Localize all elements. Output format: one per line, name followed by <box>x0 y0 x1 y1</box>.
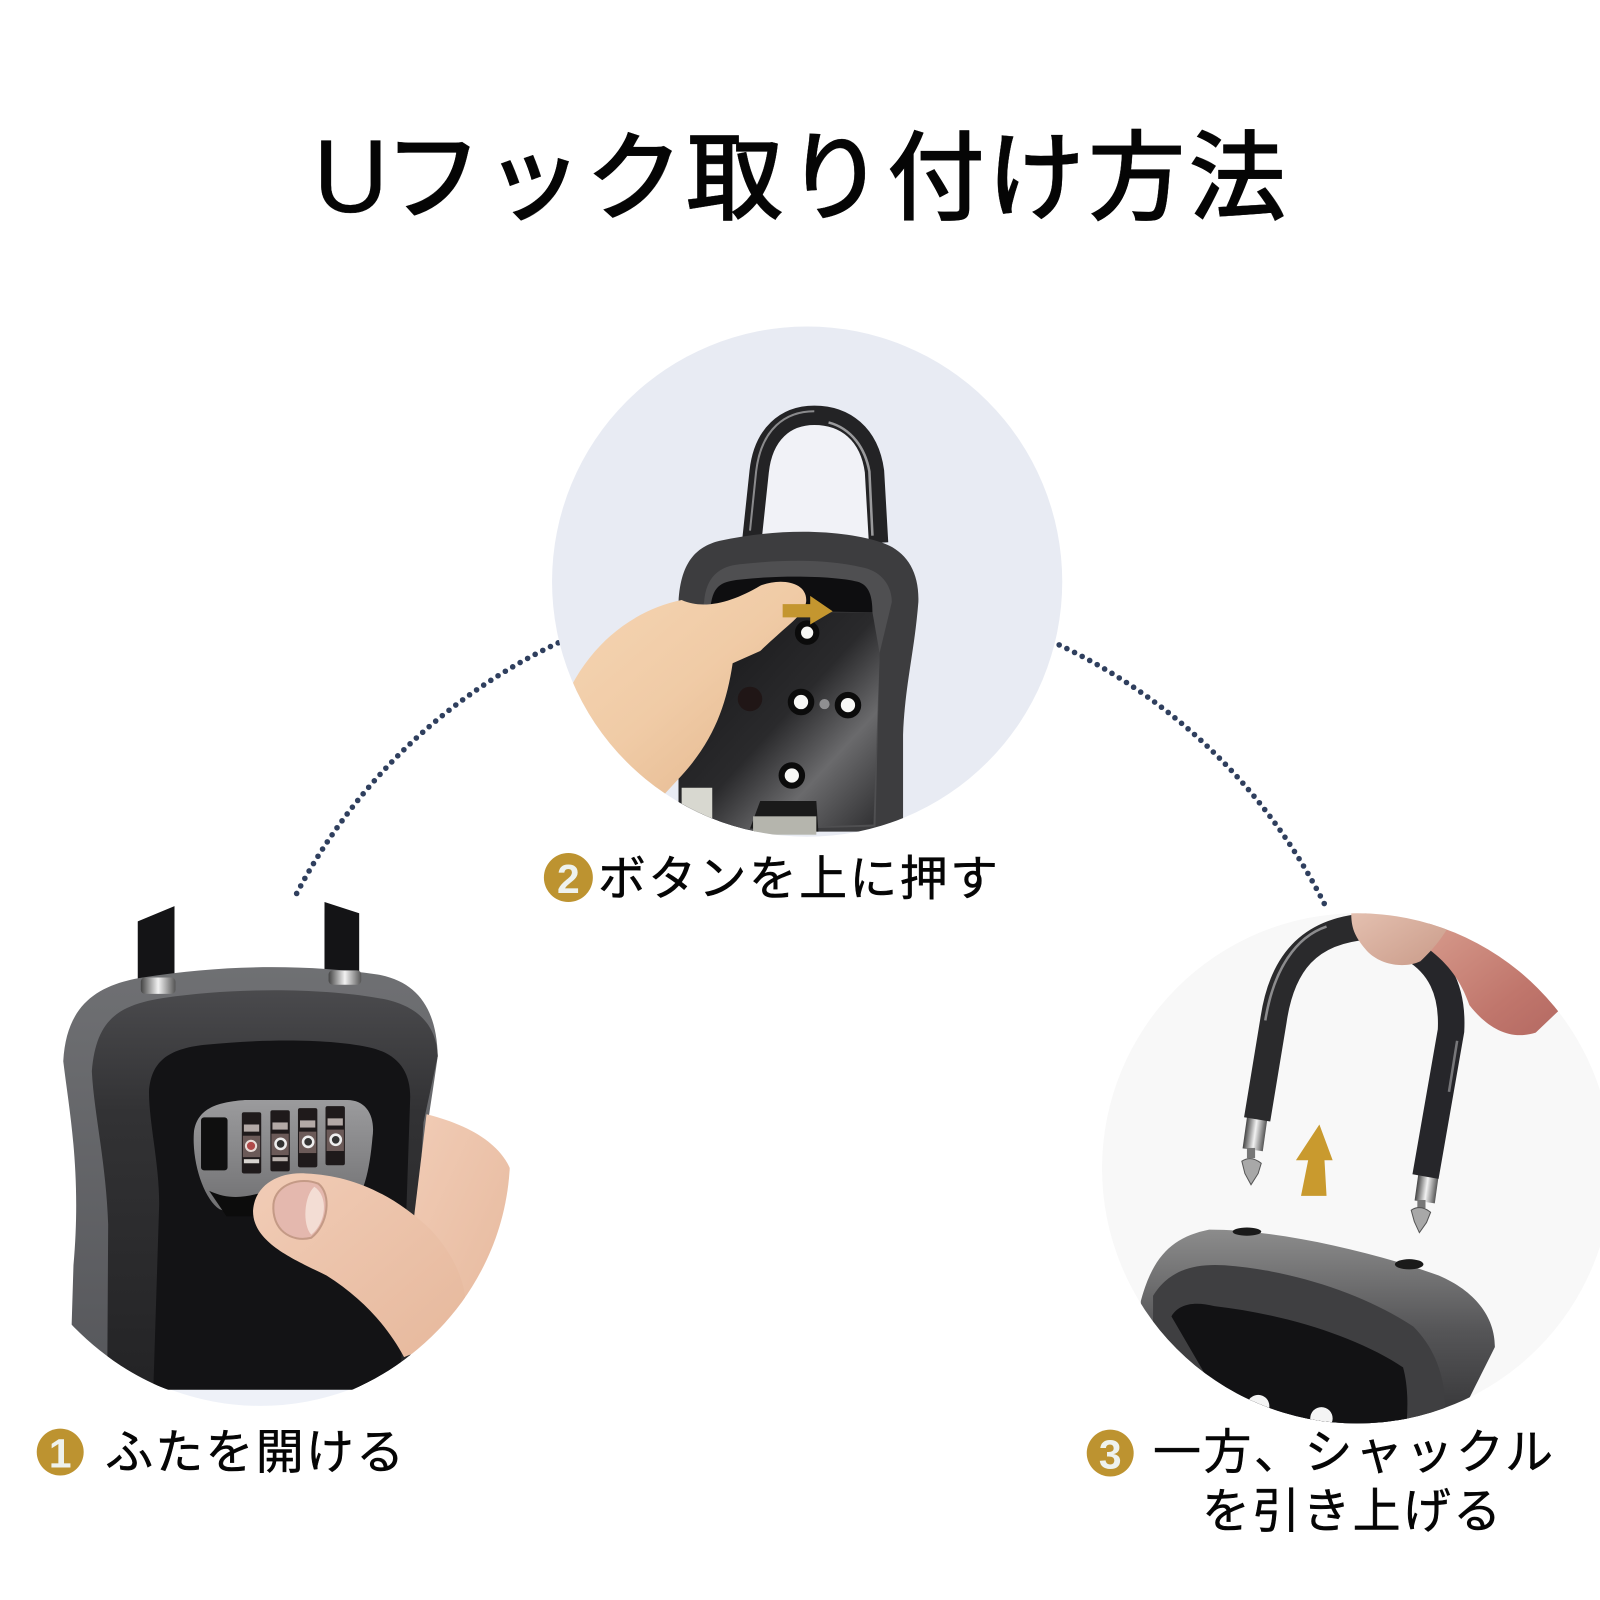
badge 3: 3 <box>1099 1431 1122 1477</box>
inner rim <box>1153 1265 1445 1429</box>
step 2 label <box>544 853 998 906</box>
inner frame <box>679 561 892 832</box>
hand <box>573 582 806 794</box>
shackle legs <box>138 906 174 985</box>
step 1 label <box>37 1426 404 1479</box>
fingers <box>1351 913 1558 1036</box>
lock body top <box>1141 1230 1495 1429</box>
lock box rear <box>679 532 918 832</box>
arrow <box>783 596 833 624</box>
panel: step 2 photo circle <box>551 327 1062 837</box>
badge 1 <box>37 1429 84 1476</box>
opening <box>1171 1304 1407 1429</box>
shackle <box>750 411 879 543</box>
dotted arc: step 2 to step 3 <box>1059 645 1327 908</box>
arrow <box>1296 1124 1333 1196</box>
pins <box>141 978 176 994</box>
dotted arc: step 1 to step 2 <box>296 643 558 895</box>
pin left <box>1242 1116 1267 1185</box>
lock body side <box>63 967 438 1398</box>
label text: ふたを開ける <box>105 1426 404 1479</box>
opening <box>710 577 872 612</box>
label line 1: 一方、シャックル <box>1153 1426 1553 1479</box>
panel: step 3 photo circle <box>1140 913 1558 1424</box>
thumb <box>253 1173 465 1357</box>
mount holes <box>782 623 858 786</box>
pin right <box>1411 1172 1439 1233</box>
title: U <box>313 119 388 235</box>
back plate <box>679 612 880 832</box>
latch <box>750 801 818 832</box>
badge 1: 1 <box>49 1430 72 1476</box>
step 3 label <box>1087 1426 1553 1539</box>
label text: ボタンを上に押す <box>598 853 998 906</box>
hand back <box>414 1114 510 1328</box>
holes <box>1233 1228 1261 1236</box>
shackle <box>1257 927 1367 1119</box>
badge 2: 2 <box>557 856 580 902</box>
panel: step 1 photo circle <box>63 902 515 1406</box>
door <box>149 1041 410 1398</box>
badge 2 <box>544 853 593 902</box>
badge 3 <box>1087 1430 1134 1477</box>
title: フック取り付け方法 <box>384 123 1286 233</box>
dial window <box>194 1100 373 1217</box>
dials <box>242 1106 345 1173</box>
label line 2: を引き上げる <box>1202 1486 1501 1539</box>
thumbnail <box>273 1181 327 1239</box>
front face <box>92 990 438 1398</box>
